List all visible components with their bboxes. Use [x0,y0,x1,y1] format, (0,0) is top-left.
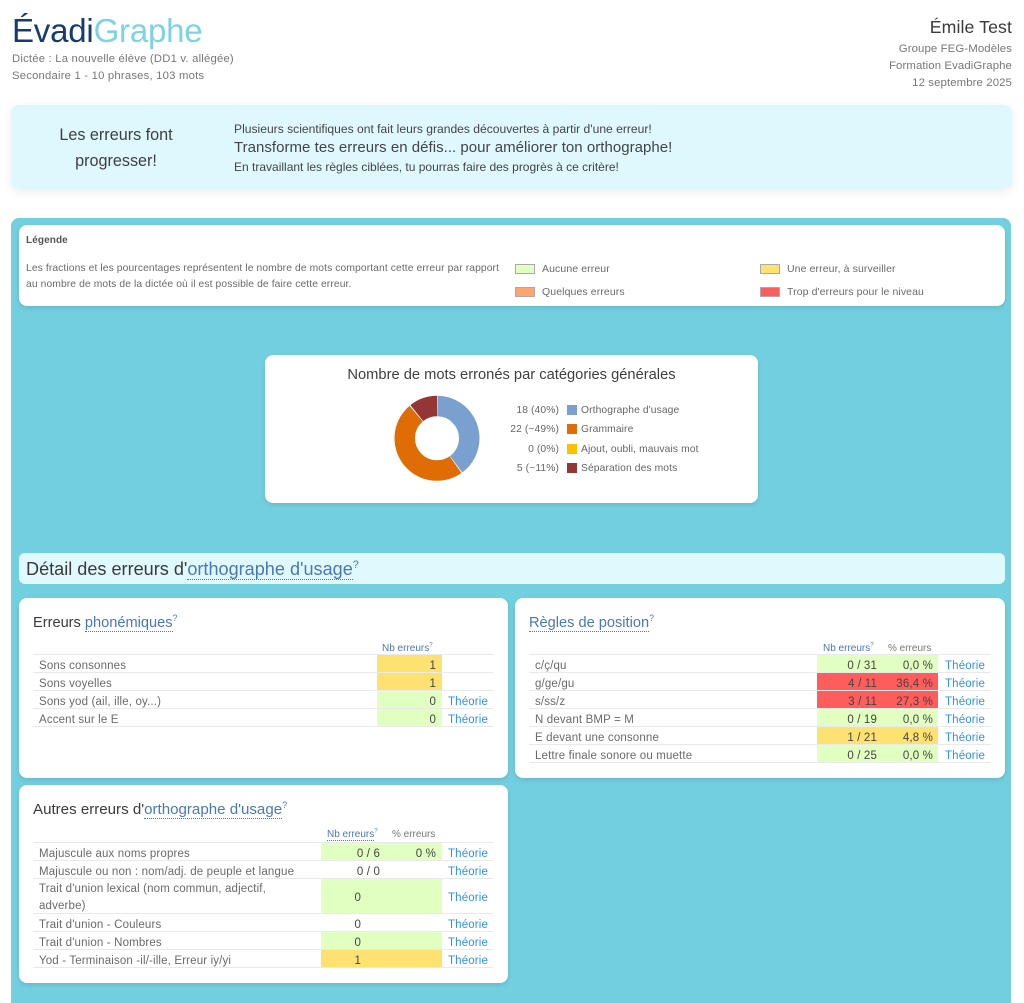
row: Sons voyelles [39,678,112,690]
row [33,879,493,914]
panel heading: Autres erreurs d'orthographe d'usage? [33,800,287,818]
row: Théorie [945,696,985,708]
value: séparation: 5 (~11%) [517,463,559,474]
row: N devant BMP = M [535,714,634,726]
row: Théorie [945,732,985,744]
row: Trait d'union - Couleurs [39,919,161,931]
row: Théorie [945,750,985,762]
row: 27,3 % [896,696,933,708]
row [33,709,493,727]
text block: student info: 12 septembre 2025 [912,77,1012,89]
row: 0 / 25 [847,750,877,762]
row: Théorie [448,955,488,967]
legend swatch: none [515,264,535,274]
chart legend [510,405,699,474]
row: 0,0 % [903,660,933,672]
row: 0 [354,892,361,904]
value: orthographe: 18 (40%) [516,405,559,416]
panel: other errors [19,785,508,983]
legend explanation: au nombre de mots de la dictée où il est possible de faire cette erreur. [26,278,351,290]
row: Théorie [448,919,488,931]
row: 36,4 % [896,678,933,690]
table [529,654,991,764]
row: 1 [429,660,436,672]
row: Accent sur le E [39,714,119,726]
swatch: ajout [567,444,577,454]
row: 0 / 6 [357,848,380,860]
text block: dictation info [12,53,234,82]
row: Yod - Terminaison -il/-ille, Erreur iy/yi [39,955,231,967]
row: Sons yod (ail, ille, oy...) [39,696,161,708]
text block: dictation info: Dictée : La nouvelle élève (DD1 v. allégée) [12,53,234,65]
row: 3 / 11 [848,696,877,708]
row: E devant une consonne [535,732,659,744]
chart title: Nombre de mots erronés par catégories générales [347,367,676,383]
legend label: one: Une erreur, à surveiller [787,263,896,275]
legend swatch: too many [760,287,780,297]
banner [11,105,1012,189]
row [33,950,493,968]
row: 4 / 11 [848,678,877,690]
row [33,655,493,673]
label: séparation: Séparation des mots [581,463,677,474]
text block: student info: Émile Test [930,17,1012,37]
row: 0,0 % [903,750,933,762]
row: Majuscule ou non : nom/adj. de peuple et langue [39,866,294,878]
column header: percent: % erreurs [392,829,435,840]
panel: legend [19,225,1005,306]
banner message: Plusieurs scientifiques ont fait leurs grandes découvertes à partir d'une erreur! [234,122,652,136]
legend explanation [26,263,499,290]
row [529,709,991,727]
swatch: séparation [567,463,577,473]
swatch: grammaire [567,424,577,434]
row: 0 [354,919,361,931]
text block: student info: Groupe FEG-Modèles [899,43,1012,55]
label: grammaire: Grammaire [581,424,633,435]
label: orthographe: Orthographe d'usage [581,405,679,416]
row [33,914,493,932]
column header: percent: % erreurs [888,643,931,654]
legend label: none: Aucune erreur [542,263,610,275]
table [33,842,493,969]
legend swatch: one [760,264,780,274]
row: 4,8 % [903,732,933,744]
row [529,691,991,709]
row: s/ss/z [535,696,565,708]
row [33,843,493,861]
row: Majuscule aux noms propres [39,848,190,860]
row: 0 % [416,848,436,860]
row [33,932,493,950]
row: Théorie [945,660,985,672]
row: 0 / 19 [847,714,877,726]
row [529,745,991,763]
row: Théorie [945,678,985,690]
row: 0 [429,696,436,708]
table [33,654,493,728]
row [529,727,991,745]
column header: count: Nb erreurs? [823,643,874,654]
text block: dictation info: Secondaire 1 - 10 phrases, 103 mots [12,70,204,82]
donut chart [394,396,480,481]
row: 1 [429,678,436,690]
row: Théorie [448,892,488,904]
row: adverbe) [39,900,86,912]
row: 1 / 21 [847,732,877,744]
row: Théorie [448,848,488,860]
row: 0 / 0 [357,866,380,878]
banner message [234,122,672,174]
row: 1 [354,955,361,967]
row: 0 [354,937,361,949]
value: grammaire: 22 (~49%) [510,424,559,435]
legend label: too many: Trop d'erreurs pour le niveau [787,286,924,298]
row: Théorie [448,866,488,878]
panel: phonemic errors [19,598,508,778]
text block: student info [889,17,1012,89]
swatch: orthographe [567,405,577,415]
row [33,861,493,879]
row: g/ge/gu [535,678,574,690]
value: ajout: 0 (0%) [528,444,559,455]
row: 0 [429,714,436,726]
row: Trait d'union - Nombres [39,937,162,949]
banner message: Transforme tes erreurs en défis... pour améliorer ton orthographe! [234,139,672,156]
row: Théorie [945,714,985,726]
row: Théorie [448,714,488,726]
row [529,673,991,691]
row: 0,0 % [903,714,933,726]
panel: position rules [515,598,1005,778]
legend label: few: Quelques erreurs [542,286,625,298]
legend swatch: few [515,287,535,297]
section heading: Détail des erreurs d'orthographe d'usage? [26,559,359,579]
main teal panel [11,218,1011,1003]
row: Théorie [448,696,488,708]
column header: Nb erreurs? [382,643,433,654]
panel: donut chart [265,355,758,503]
text block: student info: Formation EvadiGraphe [889,60,1012,72]
legend heading: Légende [26,235,68,246]
row: Sons consonnes [39,660,126,672]
row [33,691,493,709]
legend explanation: Les fractions et les pourcentages représentent le nombre de mots comportant cette erreur par rapport [26,263,499,274]
row: Trait d'union lexical (nom commun, adjectif, [39,883,266,895]
panel heading: Règles de position? [529,613,654,631]
row: 0 / 31 [847,660,877,672]
column header: count: Nb erreurs? [327,829,378,840]
row: Théorie [448,937,488,949]
banner message: En travaillant les règles ciblées, tu pourras faire des progrès à ce critère! [234,160,619,174]
row: Lettre finale sonore ou muette [535,750,692,762]
section heading [19,553,1005,584]
banner heading: Les erreurs font [59,126,173,144]
logo: ÉvadiGraphe [12,12,202,49]
panel heading: Erreurs phonémiques? [33,613,177,631]
row [33,673,493,691]
banner heading: progresser! [75,152,157,170]
row: c/ç/qu [535,660,567,672]
banner heading [59,126,173,170]
row [529,655,991,673]
label: ajout: Ajout, oubli, mauvais mot [581,444,699,455]
